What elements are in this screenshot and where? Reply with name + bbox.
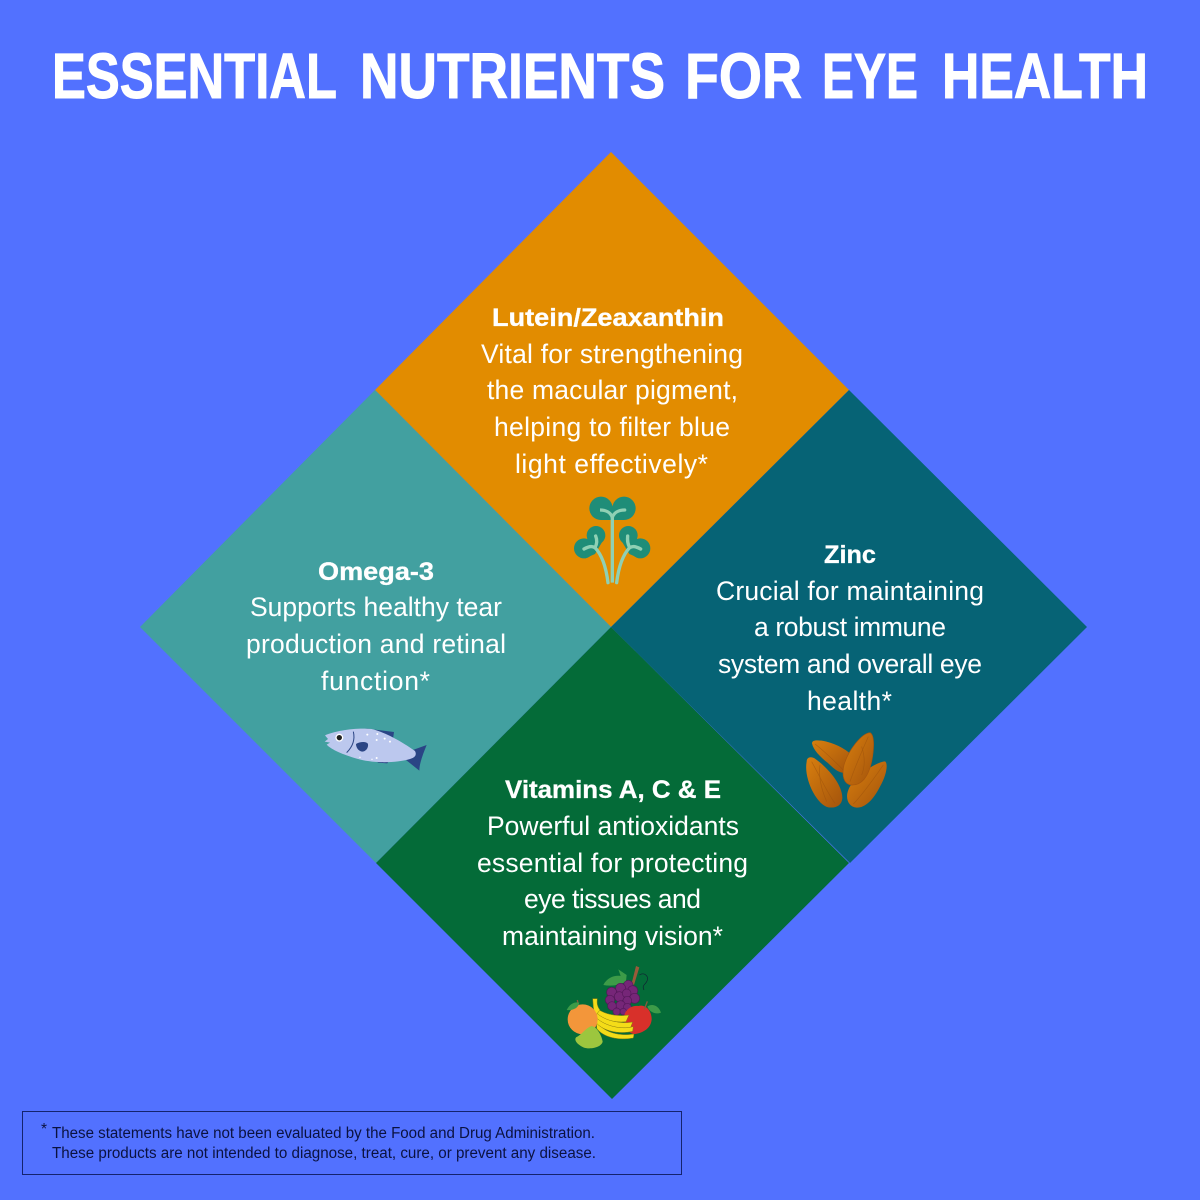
heading: Omega-3: Omega-3 <box>318 558 434 586</box>
description: Zinc: system and overall eye <box>718 649 982 679</box>
description: Zinc: a robust immune <box>754 612 946 642</box>
title: ESSENTIAL <box>52 40 337 112</box>
description: Zinc: health* <box>807 686 892 716</box>
description: Lutein/Zeaxanthin: Vital for strengthening <box>481 339 743 369</box>
description: Vitamins A, C & E <box>477 811 748 951</box>
heading: Lutein/Zeaxanthin: Lutein/Zeaxanthin <box>492 304 724 332</box>
description: Lutein/Zeaxanthin <box>481 339 743 479</box>
disclaimer text <box>52 1125 596 1162</box>
description: Vitamins A, C & E: Powerful antioxidants <box>487 811 739 841</box>
panel: Lutein/Zeaxanthin <box>375 152 849 627</box>
panel: Vitamins A, C & E <box>376 627 849 1099</box>
icon: almonds <box>806 733 887 808</box>
disclaimer box <box>22 1112 682 1174</box>
heading: Vitamins A, C & E: Vitamins A, C & E <box>505 776 721 804</box>
description: Zinc: Crucial for maintaining <box>716 576 984 606</box>
panel: Zinc <box>611 390 1087 863</box>
description: Omega-3: Supports healthy tear <box>250 592 502 622</box>
title: FOR <box>685 40 802 112</box>
description: Lutein/Zeaxanthin: helping to filter blue <box>494 412 730 442</box>
description: Lutein/Zeaxanthin: the macular pigment, <box>487 375 738 405</box>
disclaimer asterisk: * <box>41 1121 47 1138</box>
description: Omega-3: production and retinal <box>246 629 506 659</box>
icon: sprout <box>574 497 650 583</box>
description: Vitamins A, C & E: eye tissues and <box>524 884 701 914</box>
title <box>52 40 1148 112</box>
icon: fruit <box>567 966 661 1048</box>
title: NUTRIENTS <box>360 40 665 112</box>
disclaimer text: These products are not intended to diagnose, treat, cure, or prevent any disease. <box>52 1145 596 1162</box>
heading: Zinc: Zinc <box>824 541 876 569</box>
icon: fish <box>325 728 427 771</box>
description: Zinc <box>716 576 984 716</box>
title: EYE <box>822 40 918 112</box>
description: Lutein/Zeaxanthin: light effectively* <box>515 449 708 479</box>
disclaimer text: These statements have not been evaluated by the Food and Drug Administration. <box>52 1125 595 1142</box>
description: Omega-3 <box>246 592 506 696</box>
description: Omega-3: function* <box>321 666 430 696</box>
description: Vitamins A, C & E: essential for protecting <box>477 848 748 878</box>
panel: Omega-3 <box>140 390 611 863</box>
description: Vitamins A, C & E: maintaining vision* <box>502 921 723 951</box>
title: HEALTH <box>942 40 1148 112</box>
